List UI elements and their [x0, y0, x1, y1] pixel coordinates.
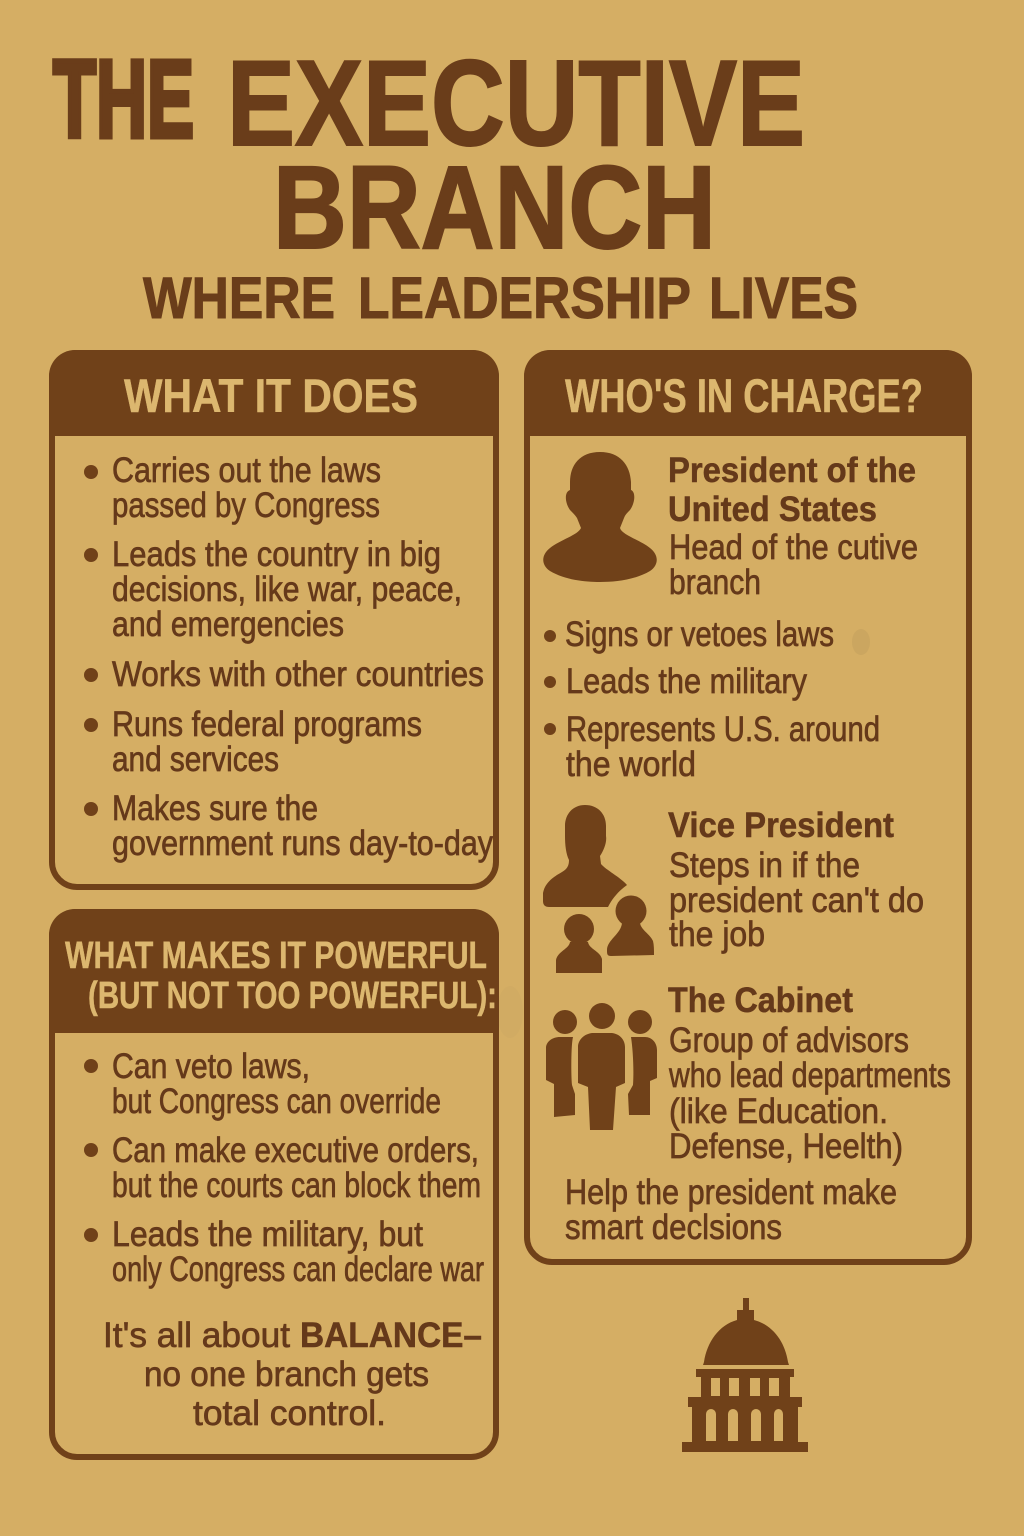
text: president: Head of the cutive — [669, 528, 918, 567]
list: what it does — [84, 451, 493, 863]
callout: balance: It's all about — [103, 1316, 290, 1355]
text: vice president: Steps in if the — [669, 846, 860, 885]
list: president duties: Signs or vetoes laws — [565, 615, 834, 654]
list: what it does: Runs federal programs — [112, 705, 422, 744]
list: what it does: Works with other countries — [112, 655, 484, 694]
list: what it does: passed by Congress — [112, 486, 380, 525]
title: THE — [53, 38, 194, 161]
text: the cabinet — [565, 981, 951, 1247]
list: checks and balances: only Congress can declare war — [112, 1250, 484, 1289]
heading: what makes it powerful — [65, 935, 497, 1017]
callout: balance — [103, 1316, 482, 1433]
list: checks and balances: but Congress can override — [112, 1082, 441, 1121]
callout: balance: BALANCE– — [300, 1316, 482, 1355]
icon: cabinet group — [546, 1003, 657, 1130]
list: checks and balances — [84, 1047, 484, 1289]
title — [53, 35, 805, 274]
list: what it does: Carries out the laws — [112, 451, 381, 490]
heading: who's in charge: WHO'S IN CHARGE? — [565, 369, 923, 422]
text: the cabinet: The Cabinet — [668, 981, 853, 1020]
text: the cabinet: (like Education. — [669, 1092, 888, 1131]
panel: what makes it powerful — [49, 909, 499, 1457]
subtitle: LIVES — [709, 266, 858, 331]
callout: balance: total control. — [193, 1394, 386, 1433]
subtitle: WHERE — [143, 266, 335, 331]
list: what it does: and services — [112, 740, 279, 779]
panel: what it does — [49, 350, 499, 887]
text: vice president: Vice President — [668, 806, 894, 845]
subtitle — [143, 266, 858, 331]
icon: vice president with two people — [543, 805, 654, 973]
text: president: President of the — [668, 451, 916, 490]
list: checks and balances: Can veto laws, — [112, 1047, 310, 1086]
heading: what makes it powerful: (BUT NOT TOO POWERFUL): — [88, 975, 497, 1017]
list: president duties: the world — [566, 745, 696, 784]
subtitle: LEADERSHIP — [358, 266, 691, 331]
text: the cabinet: Group of advisors — [669, 1021, 909, 1060]
list: president duties: Represents U.S. around — [566, 710, 880, 749]
heading: what makes it powerful: WHAT MAKES IT POWERFUL — [65, 935, 487, 977]
list: checks and balances: but the courts can block them — [112, 1166, 481, 1205]
list: what it does: decisions, like war, peace, — [112, 570, 462, 609]
text: vice president: president can't do — [669, 881, 924, 920]
text: the cabinet: who lead departments — [668, 1056, 951, 1095]
list: checks and balances: Leads the military, but — [112, 1215, 423, 1254]
text: president: branch — [669, 563, 761, 602]
panel: who's in charge — [524, 350, 972, 1262]
heading: what it does: WHAT IT DOES — [124, 369, 418, 422]
list: president duties — [544, 615, 880, 784]
text: vice president: the job — [669, 915, 765, 954]
icon: capitol building — [682, 1298, 808, 1452]
text: the cabinet: smart declsions — [565, 1208, 782, 1247]
list: checks and balances: Can make executive orders, — [112, 1131, 479, 1170]
list: what it does: Makes sure the — [112, 789, 318, 828]
callout: balance: no one branch gets — [144, 1355, 429, 1394]
text: the cabinet: Defense, Heelth) — [669, 1127, 903, 1166]
text: the cabinet: Help the president make — [565, 1173, 897, 1212]
list: what it does: government runs day-to-day — [112, 824, 493, 863]
list: president duties: Leads the military — [566, 662, 807, 701]
title: BRANCH — [273, 142, 716, 274]
text: vice president — [668, 806, 924, 954]
title: EXECUTIVE — [227, 35, 805, 171]
list: what it does: and emergencies — [112, 605, 344, 644]
list: what it does: Leads the country in big — [112, 535, 441, 574]
icon: president silhouette — [543, 452, 657, 582]
text: president: United States — [668, 490, 877, 529]
text: president — [668, 451, 918, 602]
